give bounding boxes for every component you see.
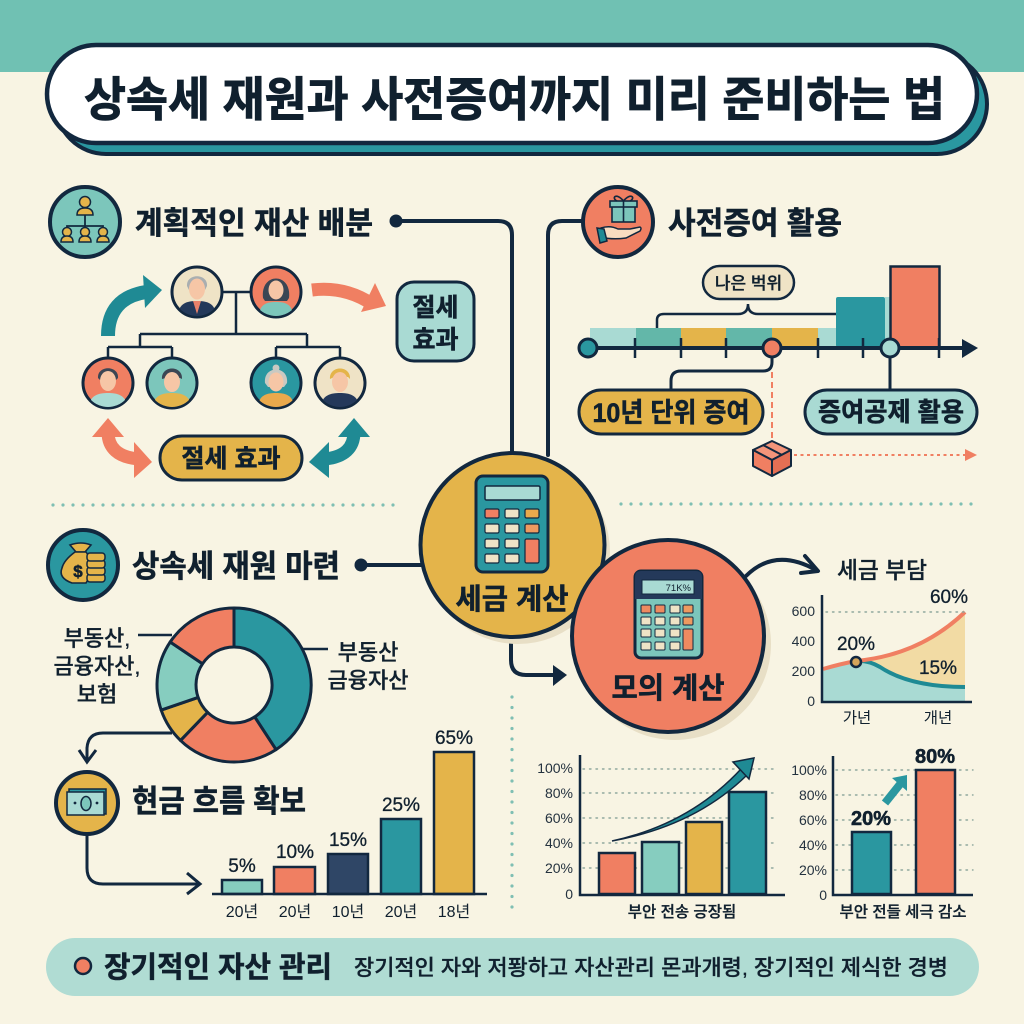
callout: ten-year gift pill: 10년 단위 증여	[592, 398, 750, 428]
y axis labels	[792, 603, 815, 709]
heading: advance gift: 사전증여 활용	[668, 206, 842, 241]
bar chart: growth: 80%	[545, 785, 573, 801]
icon: gift on hand	[583, 187, 653, 257]
left donut label	[53, 626, 172, 707]
heading: cash flow: 현금 흐름 확보	[132, 784, 306, 819]
callout: tax saving pill	[160, 436, 302, 480]
bar chart: reduction	[791, 746, 973, 921]
arrow: small teal	[885, 775, 907, 803]
arrow: to tax burden	[746, 556, 818, 576]
arrow: donut to cash flow	[79, 733, 172, 762]
arrow: coral double	[92, 418, 152, 478]
callout: tax saving box	[397, 282, 474, 361]
bar chart: growth: 부안 전송 긍장됨	[628, 903, 736, 921]
connector: to mock calc	[511, 640, 567, 686]
icon: coral section calculator: 71K%	[666, 583, 692, 594]
bar chart: reduction: 40%	[799, 837, 827, 853]
marker dot	[851, 657, 861, 667]
y axis labels: 0	[807, 693, 815, 709]
avatar: grandfather	[172, 267, 222, 317]
bar chart: cash flow: 10%	[276, 842, 314, 863]
y axis labels: 400	[792, 633, 815, 649]
bar chart: cash flow: 18년	[438, 903, 470, 921]
left donut label: 부동산,	[64, 626, 130, 651]
arrow: to bars	[87, 834, 200, 894]
bar chart: growth	[537, 755, 785, 921]
bar chart: reduction: 20%	[799, 862, 827, 878]
connector: gift section to calculator	[548, 221, 582, 455]
heading: funding: 상속세 재원 마련	[132, 549, 340, 584]
bar chart: cash flow: 20년	[385, 903, 417, 921]
heading: planned distribution: 계획적인 재산 배분	[135, 206, 373, 241]
bar chart: cash flow: 25%	[382, 795, 420, 816]
avatar: child one	[83, 358, 133, 408]
bar chart: cash flow: 20년	[226, 903, 258, 921]
right donut label	[303, 640, 408, 693]
top teal band	[0, 0, 1024, 72]
icon: family org chart	[50, 187, 120, 257]
footer bullet	[75, 958, 91, 974]
bar chart: cash flow: 5%	[228, 856, 256, 877]
x label two: 개년	[924, 709, 952, 727]
footer heading: 장기적인 자산 관리	[104, 951, 332, 984]
title banner: 상속세 재원과 사전증여까지 미리 준비하는 법	[84, 73, 945, 126]
avatar: grandmother	[251, 267, 301, 317]
panel: mock calculation	[572, 540, 818, 740]
bar chart: reduction: 80%	[799, 787, 827, 803]
title banner	[47, 45, 987, 154]
arrow: coral to tax saving	[312, 283, 386, 312]
value: 60%: 60%	[930, 587, 968, 608]
bar chart: cash flow: 10년	[332, 903, 364, 921]
arrow: dotted coral	[794, 449, 977, 461]
icon: coral section calculator	[635, 571, 702, 658]
bar chart: cash flow: 65%	[435, 728, 473, 749]
divider right	[621, 502, 972, 506]
callout: gift deduction pill: 증여공제 활용	[818, 397, 964, 427]
bar chart: reduction: 20%	[851, 808, 891, 830]
avatar: child two	[147, 358, 197, 408]
value: 20%: 20%	[837, 634, 875, 655]
panel: cash flow	[56, 728, 487, 921]
divider left	[53, 503, 400, 507]
label: mock calc: 모의 계산	[612, 672, 724, 705]
panel: tax burden chart	[792, 557, 972, 727]
bar chart: cash flow: 15%	[329, 830, 367, 851]
y axis labels: 200	[792, 663, 815, 679]
y axis labels: 600	[792, 603, 815, 619]
avatar: child three	[251, 358, 301, 408]
brace connector	[657, 304, 836, 328]
callout: gift deduction pill	[805, 390, 977, 434]
avatar: child four	[315, 358, 365, 408]
left donut label: 보험	[77, 682, 117, 707]
bar chart: cash flow: 20년	[279, 903, 311, 921]
footer text: 장기적인 자와 저퐝하고 자산관리 몬과개령, 장기적인 제식한 경병	[354, 956, 948, 980]
line chart areas	[823, 612, 965, 701]
panel: advance gift usage	[579, 187, 978, 476]
bar chart: growth: 20%	[545, 860, 573, 876]
timeline colour segments	[590, 266, 940, 348]
callout: tax saving box: 효과	[412, 326, 459, 354]
tax calc circle	[420, 453, 610, 644]
bar chart: reduction: 60%	[799, 812, 827, 828]
right donut label: 금융자산	[328, 668, 408, 693]
connector: funding to calculator	[354, 558, 422, 572]
divider vertical	[510, 697, 514, 916]
x label one: 가년	[843, 709, 871, 727]
icon: teal calculator	[476, 476, 548, 572]
connector: family section to calculator	[390, 214, 512, 452]
panel: central tax calculation	[420, 453, 610, 686]
connector: ten-year gift	[671, 357, 772, 391]
mock calc circle	[572, 540, 771, 740]
callout: tax saving box: 절세	[412, 294, 459, 322]
connector: gift deduction	[888, 357, 892, 391]
footer panel: long-term asset management	[46, 938, 979, 996]
arrow: teal double	[309, 418, 370, 478]
right donut label: 부동산	[338, 640, 398, 665]
bar chart: reduction: 80%	[915, 746, 955, 768]
callout: ten-year gift pill	[579, 390, 763, 434]
heading: tax burden: 세금 부담	[837, 557, 927, 583]
panel: planned asset distribution	[50, 187, 474, 480]
panel: inheritance tax funding	[48, 530, 422, 762]
donut chart	[157, 608, 311, 762]
callout: tax saving pill: 절세 효과	[182, 445, 280, 473]
bar chart: reduction: 부안 전들 세극 감소	[840, 903, 966, 921]
bar chart: reduction: 0	[819, 887, 827, 903]
bar chart: growth: 40%	[545, 835, 573, 851]
icon: cash	[56, 772, 118, 834]
left donut label: 금융자산,	[53, 654, 141, 679]
bar chart: cash flow	[212, 728, 487, 921]
dashed coral line down	[771, 372, 773, 438]
timeline axis	[579, 338, 978, 358]
callout: label pill	[703, 266, 794, 299]
dotted guide	[826, 611, 965, 613]
arrow: teal curved up to parents	[108, 275, 162, 336]
bar chart: growth: 0	[565, 886, 573, 902]
label: tax calc: 세금 계산	[456, 583, 568, 616]
family tree lines	[108, 292, 340, 358]
bar chart: growth: 100%	[537, 760, 573, 776]
icon: money bag: $	[73, 562, 83, 581]
bar chart: growth: 60%	[545, 810, 573, 826]
callout: label pill: 나은 벅위	[715, 274, 782, 293]
chart axes	[822, 595, 972, 702]
icon: package box	[753, 441, 791, 476]
value: 15%: 15%	[919, 658, 957, 679]
icon: money bag	[48, 530, 118, 600]
arrow: growth swoosh	[612, 758, 754, 841]
bar chart: reduction: 100%	[791, 762, 827, 778]
